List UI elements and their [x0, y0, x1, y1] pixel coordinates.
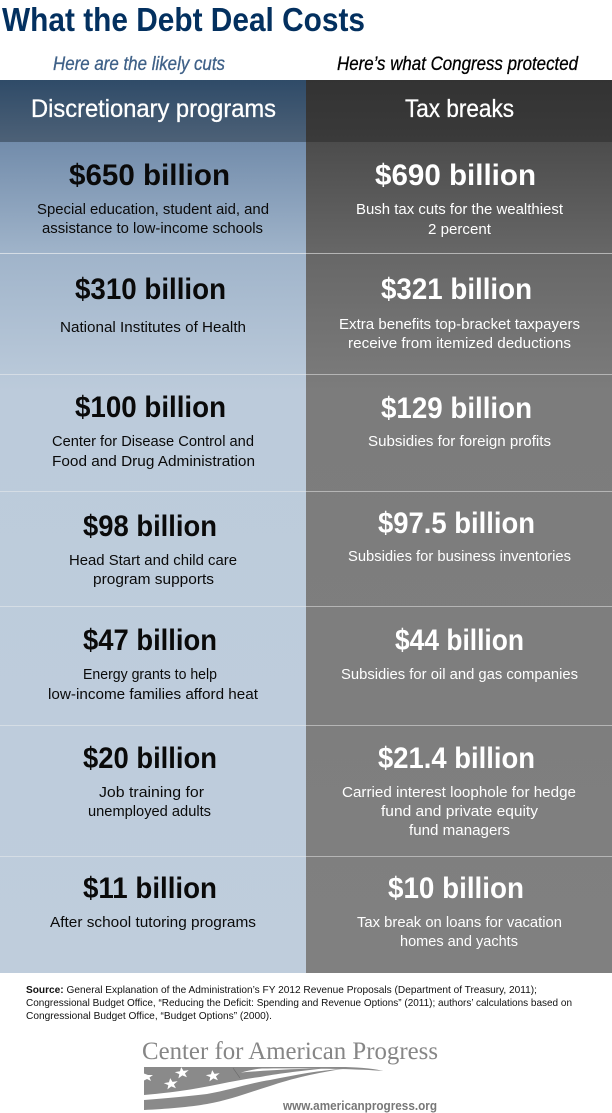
- row: $310 billion: $310 billion: [75, 273, 226, 306]
- row: $129 billion: Subsidies for foreign profits: [368, 434, 551, 450]
- column header: tax breaks: Tax breaks: [405, 95, 514, 123]
- row: $21.4 billion: Carried interest loophole for hedge: [342, 785, 576, 801]
- row: $100 billion: [52, 391, 255, 470]
- row: $98 billion: Head Start and child care: [69, 553, 237, 569]
- column header: discretionary programs: [0, 80, 306, 142]
- logo: Center for American Progress: [142, 1038, 438, 1113]
- row: $47 billion: low-income families afford heat: [48, 687, 258, 703]
- icon: flag: [144, 1066, 383, 1110]
- row: $20 billion: [83, 742, 217, 820]
- row: $20 billion: Job training for: [99, 785, 204, 801]
- row: $690 billion: Bush tax cuts for the wealthiest: [356, 202, 563, 218]
- row: $47 billion: Energy grants to help: [83, 667, 217, 683]
- title: What the Debt Deal Costs: [2, 1, 365, 38]
- row: $20 billion: $20 billion: [83, 742, 217, 775]
- row: $47 billion: $47 billion: [83, 624, 217, 657]
- row: $650 billion: [37, 159, 269, 237]
- left column subheading: Here are the likely cuts: [53, 53, 225, 75]
- source note: Source: General Explanation of the Administration’s FY 2012 Revenue Proposals (Department of Treasury, 2011);: [26, 984, 537, 996]
- row: $21.4 billion: fund managers: [409, 823, 510, 839]
- row: $44 billion: $44 billion: [395, 624, 524, 657]
- row: $21.4 billion: [342, 742, 576, 839]
- row: $129 billion: $129 billion: [381, 392, 532, 425]
- row: $98 billion: [69, 510, 237, 588]
- row: $690 billion: $690 billion: [375, 159, 536, 192]
- row: $21.4 billion: $21.4 billion: [378, 742, 535, 775]
- row: $21.4 billion: fund and private equity: [381, 804, 539, 820]
- row: $44 billion: [341, 624, 578, 683]
- panel: tax breaks: [306, 80, 612, 973]
- row: $11 billion: $11 billion: [83, 872, 217, 905]
- row: $100 billion: Center for Disease Control and: [52, 434, 254, 450]
- row: $310 billion: [60, 273, 246, 336]
- row: $129 billion: [368, 392, 551, 450]
- column header: tax breaks: [306, 80, 612, 142]
- row: $10 billion: [357, 872, 562, 950]
- row: $10 billion: $10 billion: [388, 872, 524, 905]
- row: $690 billion: [356, 159, 563, 238]
- row: $20 billion: unemployed adults: [88, 804, 211, 820]
- row: $650 billion: assistance to low-income schools: [42, 221, 263, 237]
- right column subheading: Here’s what Congress protected: [337, 53, 579, 75]
- row: $321 billion: Extra benefits top-bracket taxpayers: [339, 317, 580, 333]
- row: $310 billion: National Institutes of Health: [60, 320, 246, 336]
- row: $100 billion: $100 billion: [75, 391, 226, 424]
- row: $97.5 billion: Subsidies for business inventories: [348, 549, 571, 565]
- row: $98 billion: $98 billion: [83, 510, 217, 543]
- row: $321 billion: [339, 273, 580, 352]
- column body background: [0, 142, 306, 973]
- column header: discretionary programs: Discretionary programs: [31, 95, 276, 123]
- source note: Congressional Budget Office, “Reducing the Deficit: Spending and Revenue Options” (2011); authors’ calculations based on: [26, 997, 572, 1009]
- row: $650 billion: $650 billion: [69, 159, 230, 192]
- logo: Center for American Progress: www.americanprogress.org: [282, 1099, 437, 1113]
- source note: [26, 984, 572, 1022]
- row: $11 billion: After school tutoring programs: [50, 915, 256, 931]
- row: $10 billion: Tax break on loans for vacation: [357, 915, 562, 931]
- row: $321 billion: $321 billion: [381, 273, 532, 306]
- column body background: [306, 142, 612, 973]
- row: $47 billion: [48, 624, 258, 703]
- row: $321 billion: receive from itemized deductions: [348, 336, 571, 352]
- panel: discretionary programs: [0, 80, 306, 973]
- row: $10 billion: homes and yachts: [400, 934, 518, 950]
- source note: Congressional Budget Office, “Budget Options” (2000).: [26, 1010, 272, 1022]
- row: $97.5 billion: [348, 507, 571, 565]
- row: $100 billion: Food and Drug Administration: [52, 454, 255, 470]
- row: $11 billion: [50, 872, 256, 931]
- row: $690 billion: 2 percent: [428, 222, 491, 238]
- logo: Center for American Progress: Center for American Progress: [142, 1038, 438, 1065]
- row: $98 billion: program supports: [93, 572, 214, 588]
- row: $44 billion: Subsidies for oil and gas companies: [341, 667, 578, 683]
- row: $97.5 billion: $97.5 billion: [378, 507, 535, 540]
- row: $650 billion: Special education, student aid, and: [37, 202, 269, 218]
